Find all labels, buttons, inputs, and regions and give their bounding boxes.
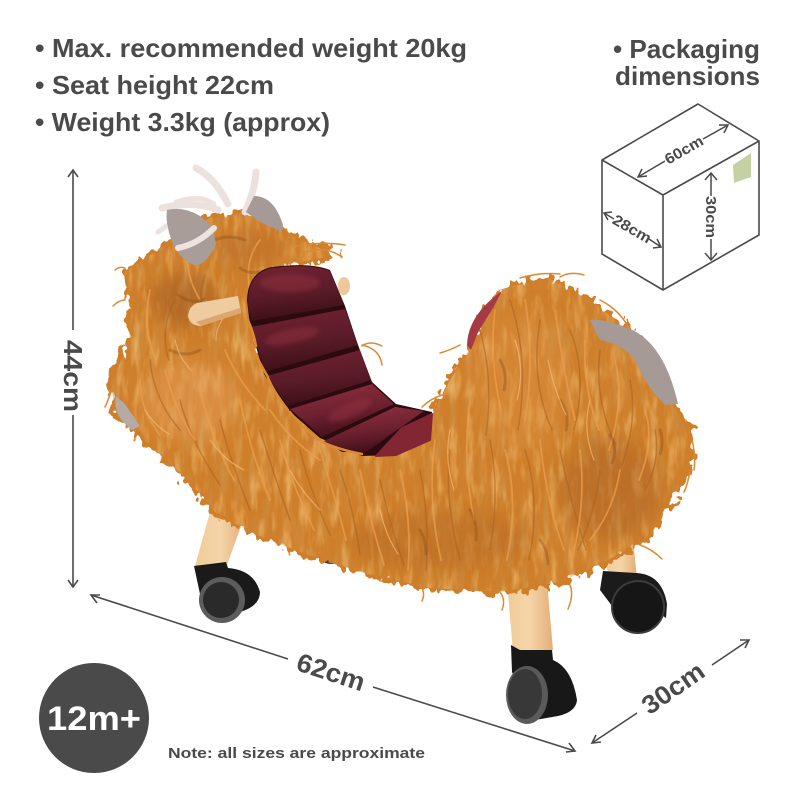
box label: 30cm: 30cm [702,196,719,238]
spec: maximum weight: • Max. recommended weight 20kg [35,33,467,63]
box outline [602,104,759,290]
back right leg and caster [600,530,667,633]
note: approximate sizes: Note: all sizes are approximate [168,745,425,762]
box label: 60cm: 60cm [662,133,707,168]
box arrow: 30cm [705,173,717,260]
height arrow [68,170,78,587]
seat pads [376,414,432,456]
box shipping label [733,153,751,183]
back ear [246,196,283,232]
age badge: 12m+ [39,663,149,773]
fur body silhouette [110,212,690,592]
left ear [167,209,216,266]
width arrow [592,640,749,743]
icon: packaging box with dimensions [602,104,759,290]
maroon seat [247,265,432,456]
front left leg and caster [194,505,260,623]
width dimension: 30cm [592,640,749,743]
length arrow [91,595,575,752]
packaging dimensions heading: • Packaging [613,34,760,64]
height label: 44cm [58,340,88,412]
front right leg and caster [506,570,577,724]
seat backing [247,265,432,456]
box label: 28cm: 28cm [609,212,654,247]
wooden handle [188,277,350,326]
width label: 30cm [636,656,710,720]
antlers [158,168,256,232]
length dimension: 62cm [91,595,575,752]
nose [115,396,140,430]
height dimension: 44cm [58,170,88,587]
underside wheel [317,553,346,564]
highland cow ride-on toy [100,168,710,724]
age badge: 12m+: 12m+ [47,700,141,738]
fur over seat edge [248,320,362,454]
spec: seat height: • Seat height 22cm [35,70,274,100]
seat highlight [260,274,375,426]
box arrow: 60cm [638,125,728,177]
antler band [178,228,214,248]
stray fur wisps [105,243,695,610]
right side ear [590,320,678,405]
packaging dimensions heading [613,34,760,91]
fur shading [140,230,660,570]
box arrow: 28cm [604,212,661,248]
spec: product weight: • Weight 3.3kg (approx) [35,107,330,137]
fur texture [110,214,686,592]
rear seat edge [467,291,502,350]
specification list [35,33,467,137]
length label: 62cm [293,647,369,697]
packaging dimensions heading: dimensions [615,61,760,91]
